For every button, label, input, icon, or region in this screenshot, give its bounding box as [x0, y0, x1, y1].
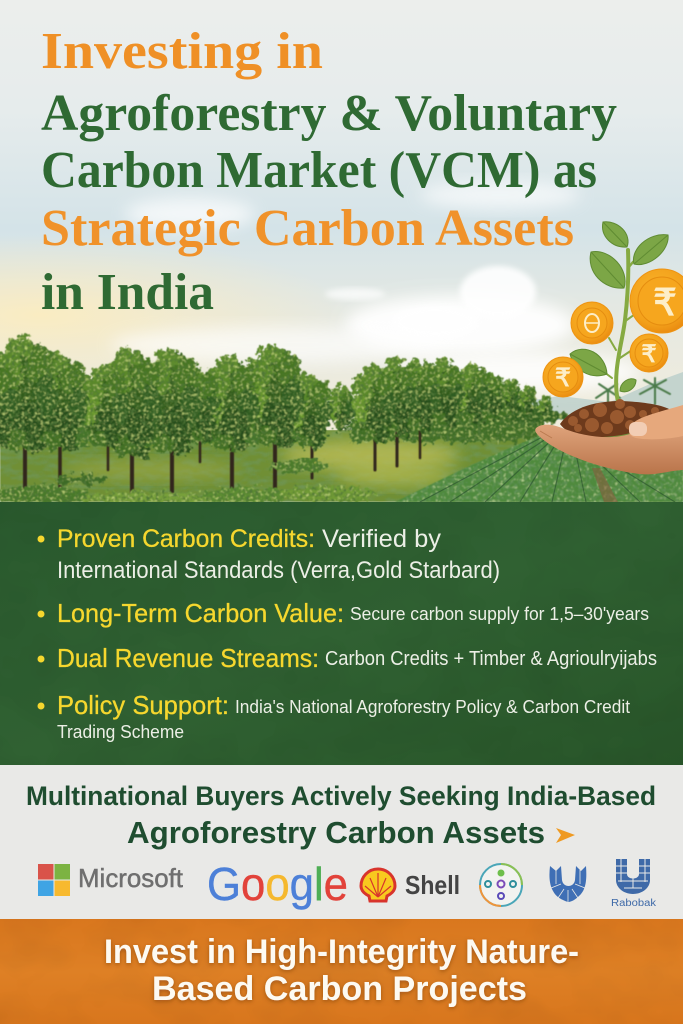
buyers heading: Multinational Buyers Actively Seeking India-Based — [26, 781, 656, 811]
logo: Rabobak: Rabobak — [611, 898, 657, 909]
panel: multinational buyers — [0, 765, 683, 919]
bullet: long-term carbon value — [38, 598, 649, 628]
coins: ₹ — [555, 364, 571, 392]
coins: ₹ — [653, 282, 677, 323]
call to action text — [104, 933, 579, 1008]
palm trees — [596, 378, 670, 404]
logo: Rabobak — [611, 859, 657, 909]
title line 4: Strategic Carbon Assets — [41, 200, 574, 257]
buyers heading — [26, 781, 656, 850]
bullet: policy support — [38, 690, 630, 742]
title line 2: Agroforestry & Voluntary — [41, 85, 617, 142]
logo: blue shield — [549, 866, 586, 902]
arrow — [556, 828, 575, 843]
bullet: proven carbon credits: Proven Carbon Credits: — [57, 525, 315, 553]
soil — [560, 399, 674, 437]
title — [41, 23, 617, 321]
bullet: dual revenue streams — [38, 643, 657, 673]
distant hills — [505, 372, 683, 420]
hand — [535, 405, 683, 474]
title line 5: in India — [41, 264, 214, 321]
buyers heading: Agroforestry Carbon Assets — [127, 815, 545, 850]
logo: Shell: Shell — [405, 870, 460, 900]
bullet: policy support: India's National Agroforestry Policy & Carbon Credit — [235, 697, 630, 717]
call to action text: Invest in High-Integrity Nature- — [104, 933, 579, 971]
bullet: proven carbon credits — [38, 525, 500, 584]
title line 1: Investing in — [41, 23, 323, 80]
logo: Shell — [361, 869, 460, 901]
bullet: long-term carbon value: Secure carbon supply for 1,5–30'years — [350, 604, 649, 624]
panel: call to action — [0, 919, 683, 1024]
coins — [543, 269, 683, 397]
logo: Microsoft: Microsoft — [78, 863, 184, 893]
tree trunks — [25, 430, 420, 500]
grass ground — [0, 430, 683, 502]
crop field — [395, 430, 683, 502]
plant stem and branches — [604, 250, 638, 402]
bullet: long-term carbon value: Long-Term Carbon Value: — [57, 598, 344, 628]
foreground bushes — [0, 460, 380, 504]
bullet: proven carbon credits: International Standards (Verra,Gold Starbard) — [57, 557, 500, 584]
bullet: proven carbon credits: Verified by — [322, 525, 441, 553]
sky — [0, 0, 683, 440]
leaves — [570, 222, 668, 392]
hero background: sky and agroforestry landscape — [0, 0, 683, 504]
bullet: policy support: Policy Support: — [57, 690, 229, 720]
bullet: dual revenue streams: Carbon Credits + Timber & Agrioulryijabs — [325, 648, 657, 670]
title line 3: Carbon Market (VCM) as — [41, 142, 597, 199]
panel: key benefits — [0, 502, 683, 765]
call to action text: Based Carbon Projects — [152, 970, 527, 1008]
icon: hand holding soil with coin plant — [535, 222, 683, 474]
logo: Google: Google — [207, 858, 348, 910]
tree rows — [0, 336, 551, 458]
bullet: policy support: Trading Scheme — [57, 722, 184, 742]
logo: Microsoft — [38, 863, 184, 896]
logo: circle dots — [480, 864, 522, 906]
back row of trees — [0, 374, 565, 444]
coins: ₹ — [641, 341, 657, 368]
bullet: dual revenue streams: Dual Revenue Streams: — [57, 643, 319, 673]
clouds — [110, 181, 640, 392]
